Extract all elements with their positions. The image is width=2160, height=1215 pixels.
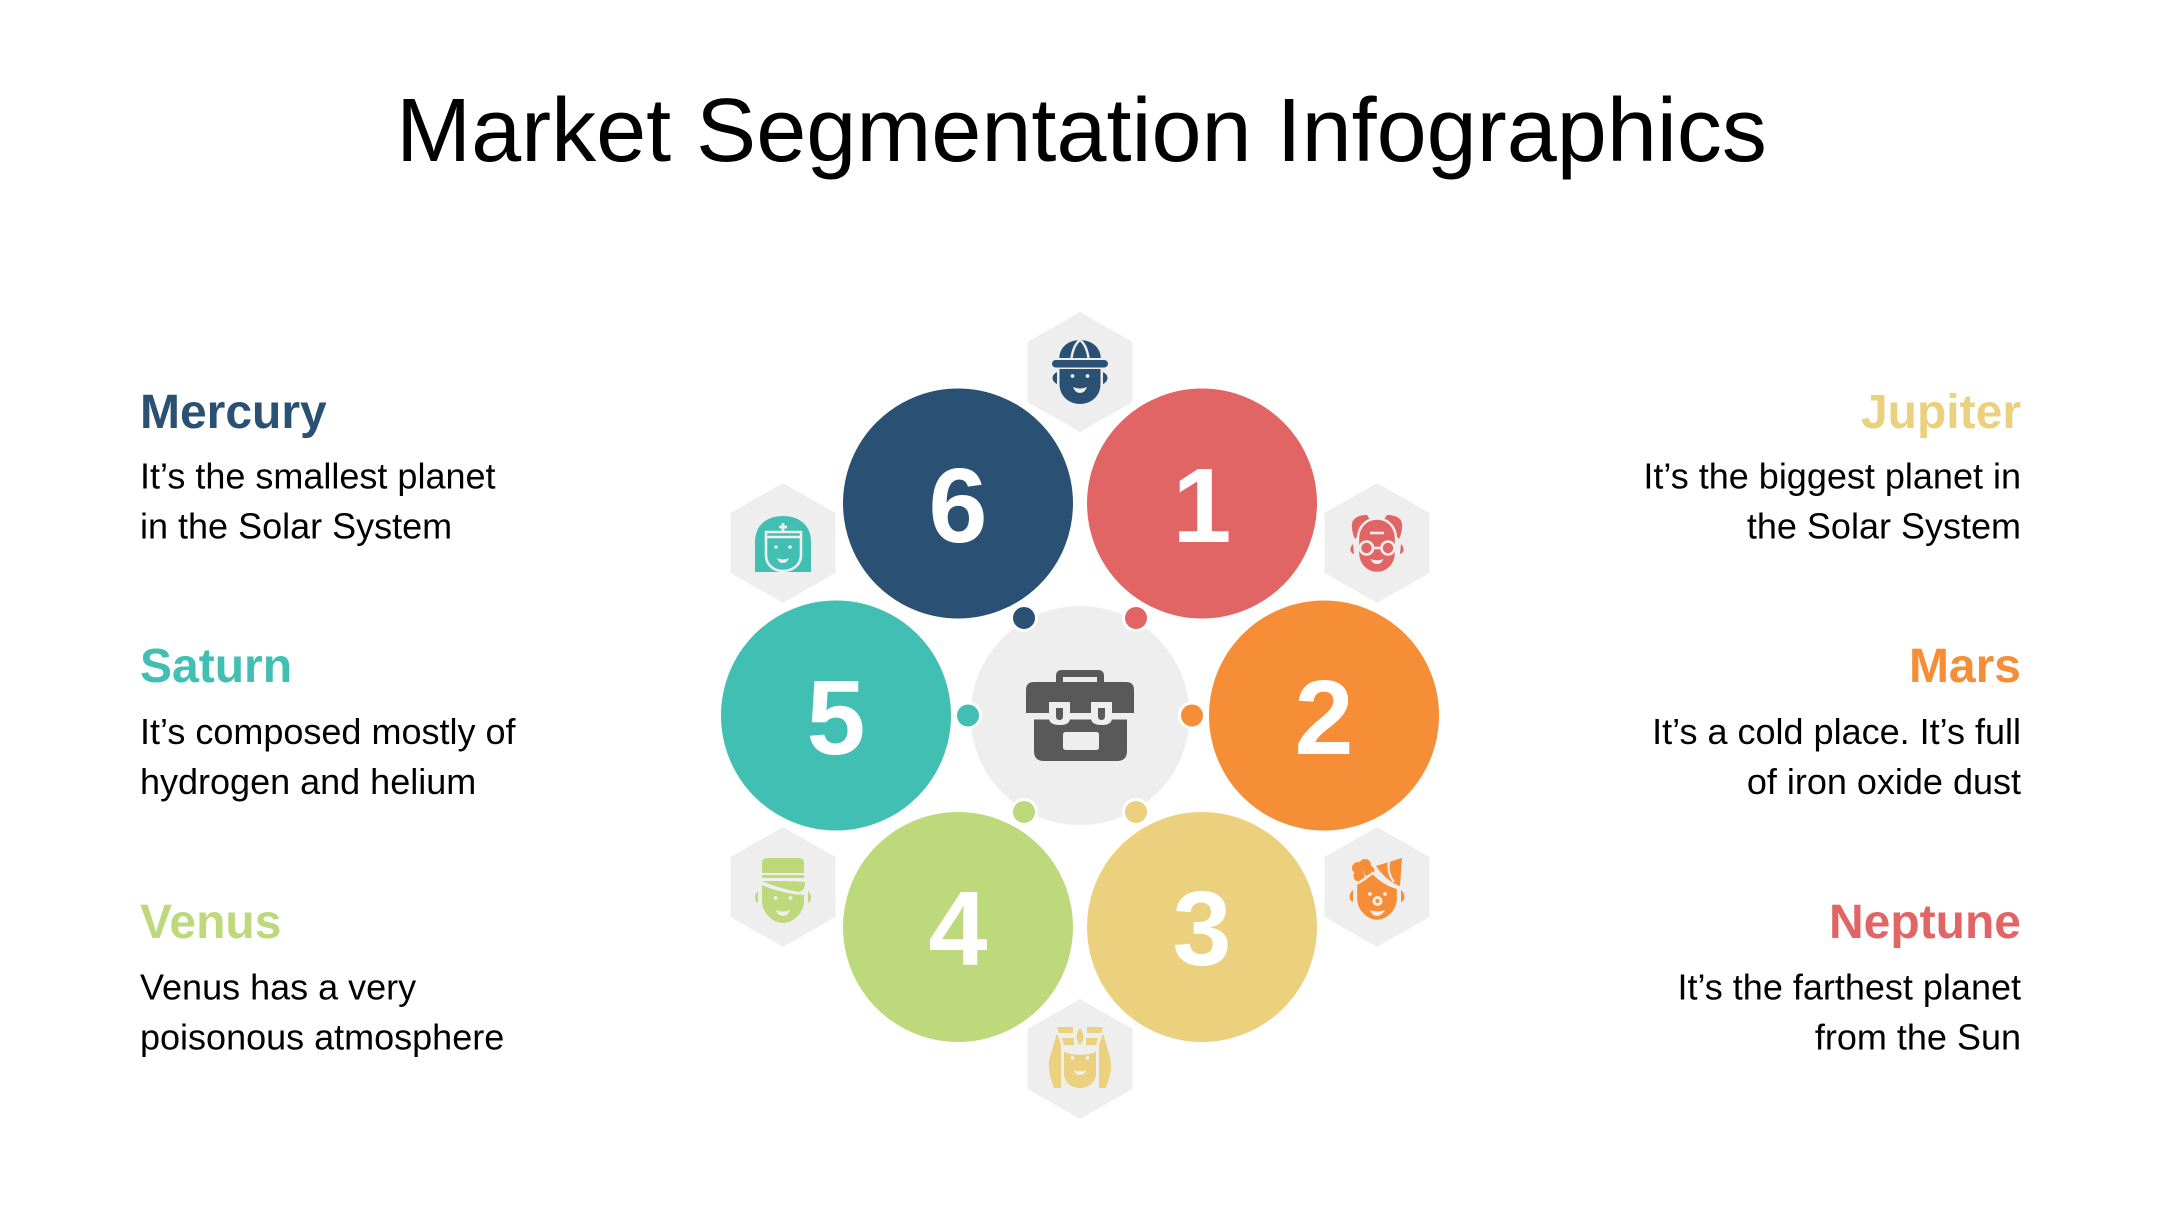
circle 4: 4: [929, 870, 988, 988]
text block: Saturn: Saturn: [140, 640, 292, 693]
text block: Venus: poisonous atmosphere: [140, 1016, 504, 1058]
text block: Venus: [140, 896, 504, 1058]
hexagon icon: hard-hat worker: [1028, 312, 1132, 432]
text block: Neptune: [1677, 896, 2021, 1058]
text block: Neptune: It’s the farthest planet: [1677, 966, 2021, 1008]
connector dot 3: [1124, 800, 1148, 824]
circle 2: 2: [1295, 659, 1353, 777]
text block: Mars: of iron oxide dust: [1747, 761, 2021, 802]
hexagon icon: nun with cross: [730, 483, 836, 603]
text block: Saturn: hydrogen and helium: [140, 761, 476, 802]
circle 1: 1: [1173, 447, 1231, 565]
connector dot 5: [956, 703, 980, 728]
text block: Mars: Mars: [1909, 640, 2021, 693]
circle 6: 6: [929, 447, 987, 565]
text block: Neptune: from the Sun: [1815, 1016, 2021, 1058]
text block: Jupiter: It’s the biggest planet in: [1643, 456, 2021, 496]
hexagon icon: queen with crown: [1028, 999, 1132, 1119]
text block: Mercury: [140, 386, 496, 546]
connector dot 4: [1012, 800, 1036, 824]
text block: Jupiter: [1643, 386, 2021, 546]
hexagon icon: old man with glasses: [1324, 483, 1430, 603]
title: Market Segmentation Infographics: [396, 81, 1767, 181]
text block: Venus: Venus: [140, 896, 281, 949]
text block: Saturn: [140, 640, 516, 802]
circle 6: [840, 385, 1076, 622]
connector dot 6: [1012, 606, 1036, 630]
text block: Jupiter: Jupiter: [1861, 386, 2021, 439]
text block: Mercury: Mercury: [140, 386, 327, 439]
text block: Mars: It’s a cold place. It’s full: [1652, 711, 2021, 752]
circle 3: 3: [1173, 870, 1231, 988]
text block: Mercury: in the Solar System: [140, 506, 452, 546]
circle 4: [840, 808, 1076, 1046]
text block: Venus: Venus has a very: [140, 966, 416, 1008]
circle 2: [1206, 597, 1442, 834]
connector dot 1: [1124, 606, 1148, 630]
hexagon icon: guard with cap: [730, 827, 836, 947]
text block: Saturn: It’s composed mostly of: [140, 711, 516, 752]
center circle with briefcase icon: [970, 606, 1190, 825]
text block: Mercury: It’s the smallest planet: [140, 456, 496, 496]
circle 5: [718, 597, 954, 834]
text block: Neptune: Neptune: [1829, 896, 2021, 949]
hexagon icon: clown: [1324, 827, 1430, 947]
circle 1: [1084, 385, 1320, 622]
connector dot 2: [1180, 703, 1204, 728]
text block: Mars: [1652, 640, 2021, 802]
circle 3: [1084, 808, 1320, 1046]
circle 5: 5: [807, 659, 865, 777]
text block: Jupiter: the Solar System: [1747, 506, 2021, 546]
